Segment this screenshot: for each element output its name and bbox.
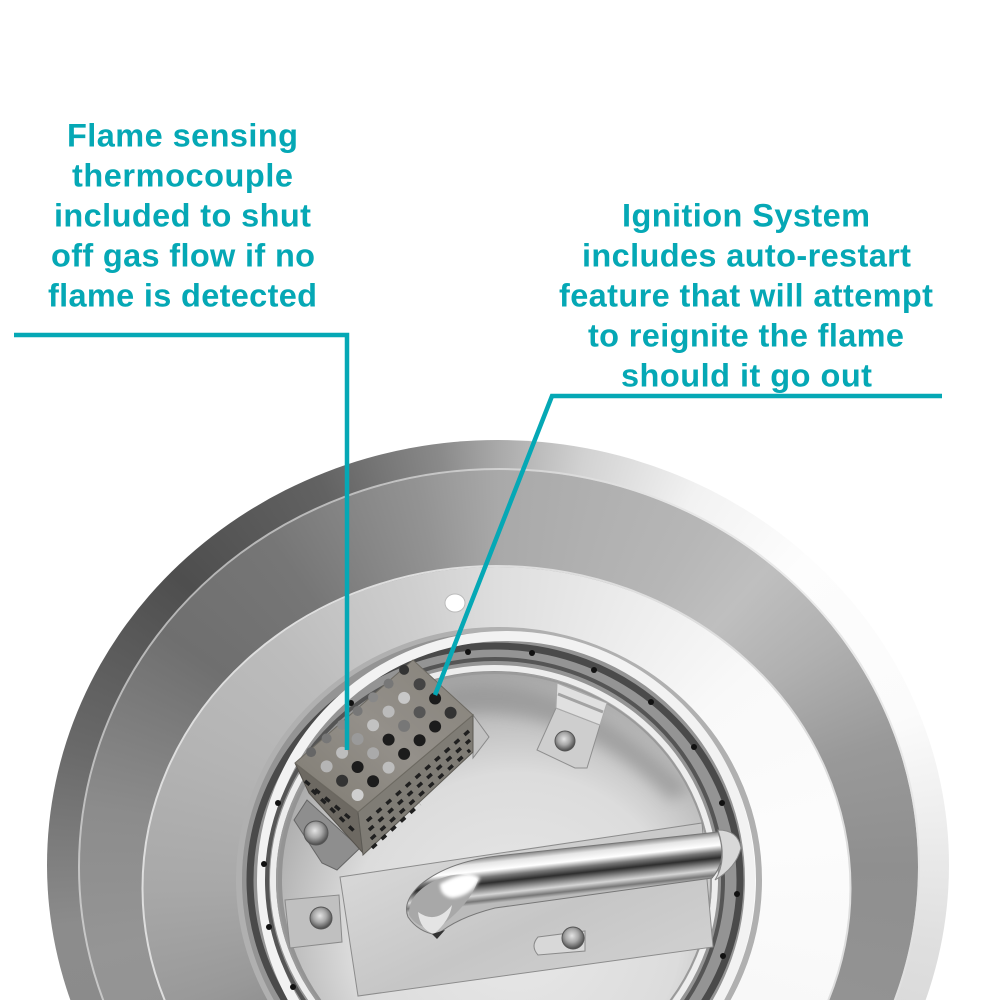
pipe elbow shading [409, 874, 478, 928]
leader: flame sensing thermocouple [14, 335, 347, 750]
callout: ignition system: to reignite the flame [588, 318, 904, 354]
box left face [295, 763, 363, 853]
screws [304, 731, 584, 949]
callout: flame sensing thermocouple: flame is detected [48, 278, 317, 314]
burner ring gas holes [261, 649, 740, 990]
callout: ignition system: includes auto-restart [582, 238, 911, 274]
box top face [295, 660, 473, 812]
burner ring [239, 630, 759, 1000]
callout: flame sensing thermocouple: included to shut [54, 198, 311, 234]
callout: flame sensing thermocouple: Flame sensing [67, 118, 298, 154]
callout: ignition system: should it go out [621, 358, 872, 394]
pan outer rim [47, 440, 949, 1000]
mounting hole in pan floor [445, 594, 465, 612]
box side slots [305, 730, 470, 848]
callout: flame sensing thermocouple: off gas flow if no [51, 238, 315, 274]
perforated sensor box [295, 660, 473, 855]
slot in plate [534, 931, 585, 955]
leader: ignition system [435, 396, 942, 695]
mounting plate [340, 823, 713, 996]
callout: ignition system: feature that will attempt [559, 278, 933, 314]
pipe weld [715, 830, 741, 880]
inner floor inside the ring [273, 668, 715, 1000]
gas inlet pipe [406, 830, 741, 939]
pan flat floor [143, 567, 850, 1000]
box side face [358, 715, 473, 855]
top right clip bracket [537, 683, 607, 768]
box top holes [306, 665, 457, 801]
callout: flame sensing thermocouple: thermocouple [72, 158, 293, 194]
callout: flame sensing thermocouple [48, 118, 317, 314]
pan sloped wall [80, 470, 918, 1000]
sensor base flange [294, 715, 489, 870]
ring shadow on floor [440, 684, 690, 800]
callout: ignition system [559, 198, 933, 394]
lower left bracket [285, 895, 342, 948]
callout: ignition system: Ignition System [622, 198, 870, 234]
photo: stainless steel burner pan [47, 440, 949, 1000]
